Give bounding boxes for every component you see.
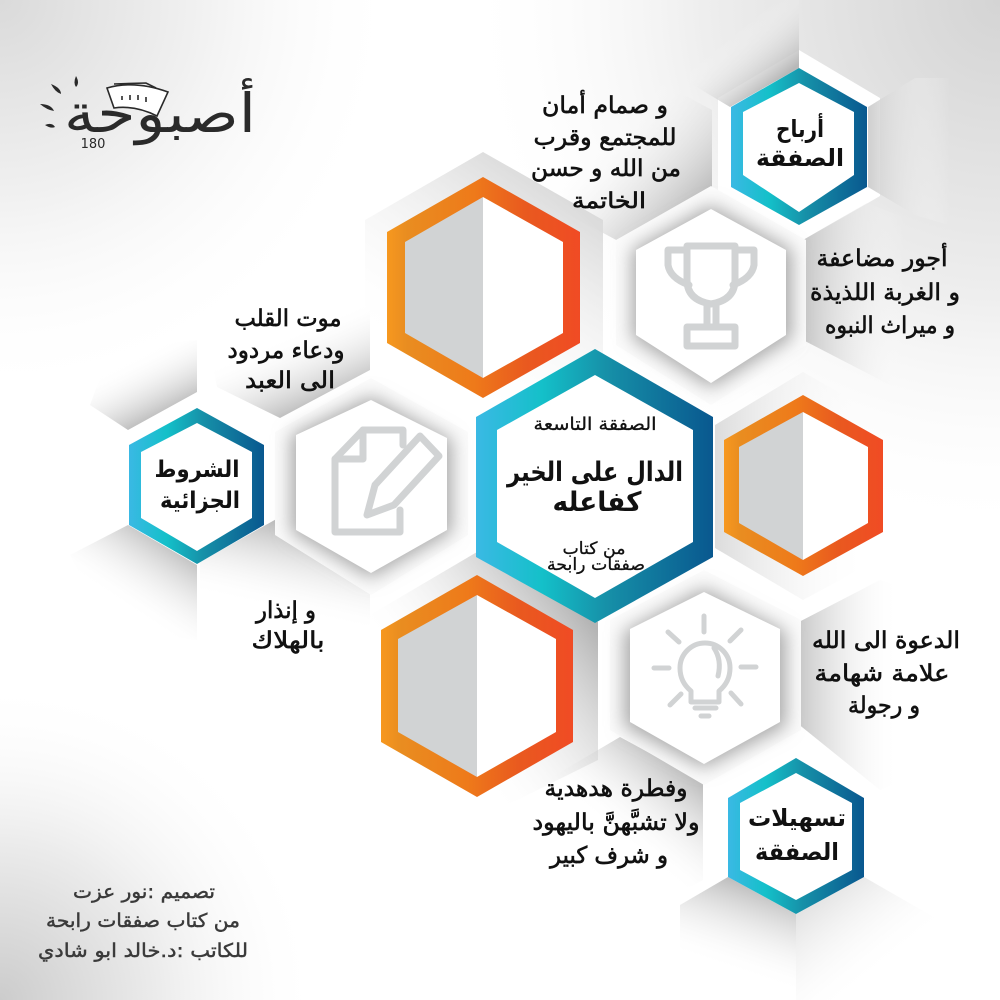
text block: lower cell: و شرف كبير <box>549 843 668 869</box>
text block: trophy side <box>810 243 960 339</box>
text block: document upper <box>228 306 344 394</box>
heading line one: تسهيلات <box>748 804 846 832</box>
text block: bulb side <box>812 628 960 719</box>
text block: top cell: من الله و حسن <box>531 156 681 182</box>
heading: central title line two: كفاعله <box>552 487 642 518</box>
heading line one: الشروط <box>154 457 240 483</box>
panel: light bulb hexagon <box>610 570 801 785</box>
panel: trophy hexagon <box>616 186 806 405</box>
credits <box>38 881 248 962</box>
hexagon: orange right <box>724 395 883 576</box>
text block: document upper: ودعاء مردود <box>228 338 344 364</box>
credits: من كتاب صفقات رابحة <box>46 910 240 932</box>
hexagon: orange bottom <box>381 575 573 797</box>
text block: lower cell <box>532 776 700 869</box>
text block: document upper: موت القلب <box>234 306 342 332</box>
icon: document and pencil <box>335 430 439 532</box>
hexagon: penal conditions <box>129 408 264 564</box>
heading line one: أرباح <box>776 113 824 143</box>
icon: trophy <box>668 246 754 346</box>
heading line two: الصفقة <box>755 838 839 866</box>
panel: orange hexagon rings background <box>358 152 905 820</box>
logo number: 180 <box>81 137 105 152</box>
text block: document lower: و إنذار <box>255 598 316 624</box>
subtitle: ninth deal: الصفقة التاسعة <box>534 414 656 435</box>
hexagon: facilities of the deal <box>728 758 864 914</box>
logo wordmark: أصبوحة <box>64 78 256 145</box>
text block: top cell <box>531 90 681 214</box>
text block: bulb side: و رجولة <box>848 693 920 719</box>
text block: top cell: الخاتمة <box>572 189 646 214</box>
logo <box>40 76 256 152</box>
text block: trophy side: أجور مضاعفة <box>816 243 948 272</box>
text block: lower cell: وفطرة هدهدية <box>544 776 688 802</box>
logo sun rays <box>40 76 78 128</box>
text block: document upper: الى العبد <box>245 368 335 394</box>
text block: top cell: و صمام أمان <box>542 90 668 119</box>
hexagon: orange top <box>387 177 580 398</box>
credits: تصميم :نور عزت <box>73 881 215 903</box>
text block: bulb side: علامة شهامة <box>814 661 950 687</box>
text block: trophy side: و الغربة اللذيذة <box>810 280 960 306</box>
panel: document hexagon <box>275 378 468 595</box>
source line two: صفقات رابحة <box>547 555 645 575</box>
central hexagon <box>476 349 713 623</box>
credits: للكاتب :د.خالد ابو شادي <box>38 940 248 962</box>
text block: trophy side: و ميراث النبوه <box>825 313 955 339</box>
heading line two: الجزائية <box>160 488 240 514</box>
white tile bands around the hexagons <box>116 50 880 932</box>
icon: light bulb <box>654 616 756 716</box>
text block: lower cell: ولا تشبَّهنَّ باليهود <box>532 808 700 836</box>
text block: bulb side: الدعوة الى الله <box>812 628 960 654</box>
text block: document lower <box>252 598 324 654</box>
heading line two: الصفقة <box>756 144 844 172</box>
hexagon: profits of the deal <box>731 68 867 225</box>
logo book icon <box>107 83 168 116</box>
heading: central title: الدال على الخير <box>505 457 683 488</box>
text block: document lower: بالهلاك <box>252 628 324 654</box>
text block: top cell: للمجتمع وقرب <box>534 125 676 151</box>
source line one: من كتاب <box>562 539 626 559</box>
